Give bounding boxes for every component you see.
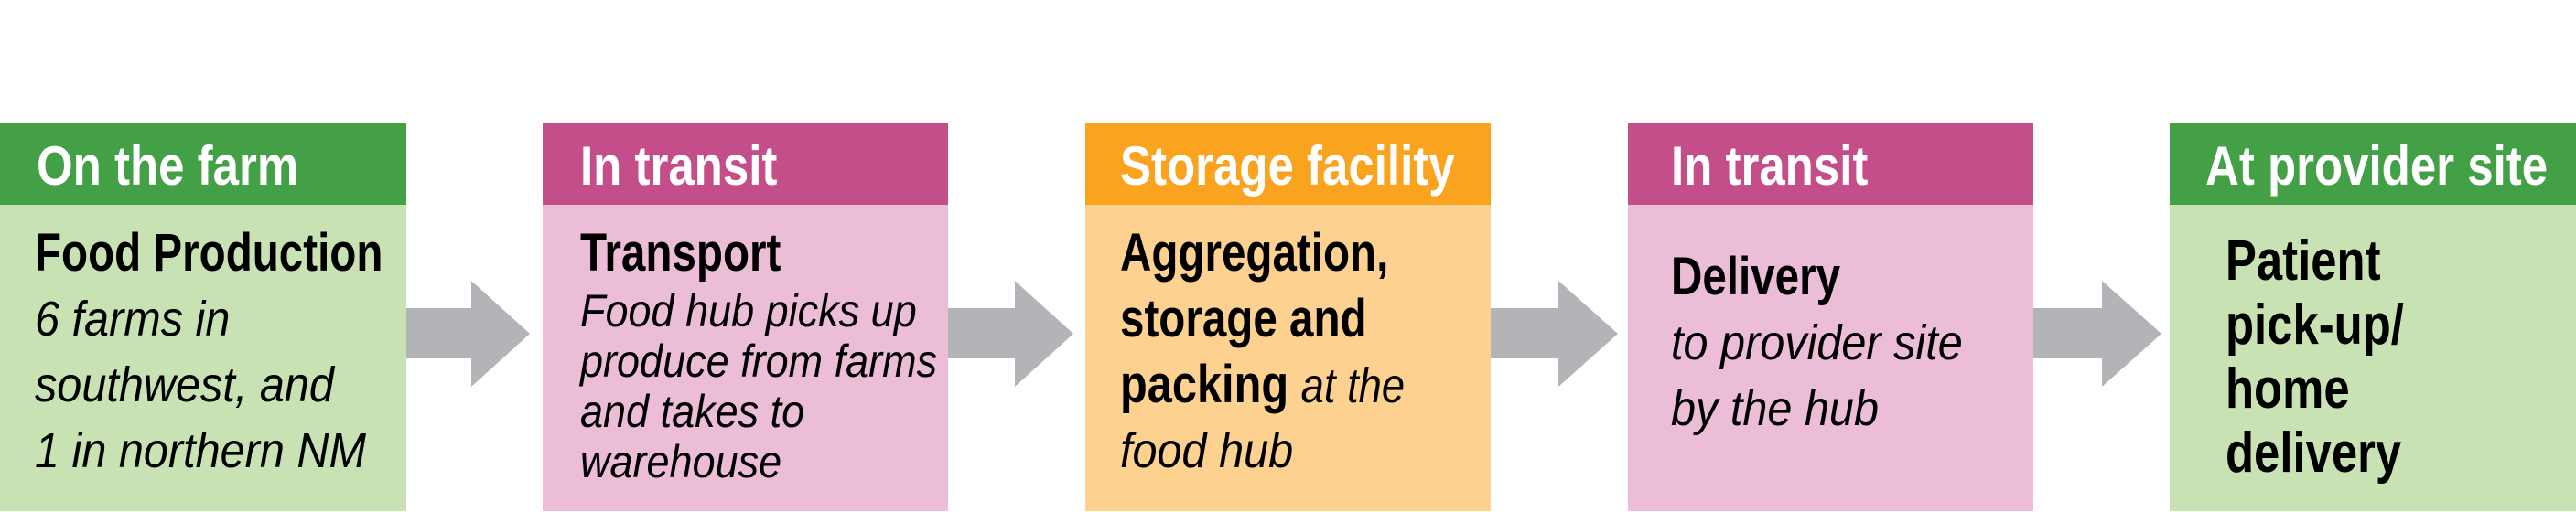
- panel: in transit transport: [543, 123, 948, 511]
- text: transport description: warehouse: [580, 436, 781, 487]
- header: at provider site: [2170, 123, 2576, 205]
- text: patient pick-up: home: [2226, 357, 2350, 421]
- text: transport description: and takes to: [580, 386, 804, 437]
- text: food production: [35, 223, 383, 478]
- header: in transit: In transit: [580, 135, 777, 197]
- text: aggregation: [1120, 223, 1405, 478]
- text: transport: Transport: [580, 223, 781, 283]
- header: in transit: [1628, 123, 2033, 205]
- text: food production: 6 farms in: [35, 292, 230, 347]
- text: delivery: to provider site: [1671, 315, 1963, 370]
- text: patient pick-up: Patient: [2226, 229, 2381, 293]
- text: food production: southwest, and: [35, 357, 334, 412]
- text: transport description: [578, 285, 937, 487]
- header: storage facility: [1085, 123, 1491, 205]
- text: transport description: produce from farms: [580, 336, 937, 387]
- text: transport description: Food hub picks up: [580, 285, 917, 336]
- header: on the farm: [0, 123, 406, 205]
- header: in transit: In transit: [1671, 135, 1868, 197]
- panel: storage facility: [1085, 123, 1491, 511]
- text: aggregation: storage and: [1120, 289, 1367, 348]
- text: delivery: Delivery: [1671, 247, 1840, 306]
- arrow 2: [948, 281, 1073, 387]
- text: patient pick-up: [2226, 229, 2404, 485]
- header: storage facility: Storage facility: [1120, 135, 1455, 197]
- text: delivery: [1671, 247, 1963, 436]
- text: delivery: by the hub: [1671, 381, 1879, 436]
- text: patient pick-up: pick-up/: [2226, 293, 2404, 357]
- panel: at provider site: [2170, 123, 2576, 511]
- text: aggregation: food hub: [1120, 423, 1293, 478]
- panel: on the farm: [0, 123, 406, 511]
- header: in transit: [543, 123, 948, 205]
- arrow 4: [2033, 281, 2161, 387]
- text: food production: Food Production: [35, 223, 383, 283]
- text: aggregation: packing at the: [1120, 355, 1405, 414]
- text: patient pick-up: delivery: [2226, 421, 2401, 485]
- arrow 1: [406, 281, 530, 387]
- text: food production: 1 in northern NM: [35, 423, 366, 478]
- panel: in transit delivery: [1628, 123, 2033, 511]
- arrow 3: [1491, 281, 1618, 387]
- header: on the farm: On the farm: [37, 135, 298, 197]
- header: at provider site: At provider site: [2205, 135, 2548, 197]
- text: aggregation: Aggregation,: [1120, 223, 1388, 283]
